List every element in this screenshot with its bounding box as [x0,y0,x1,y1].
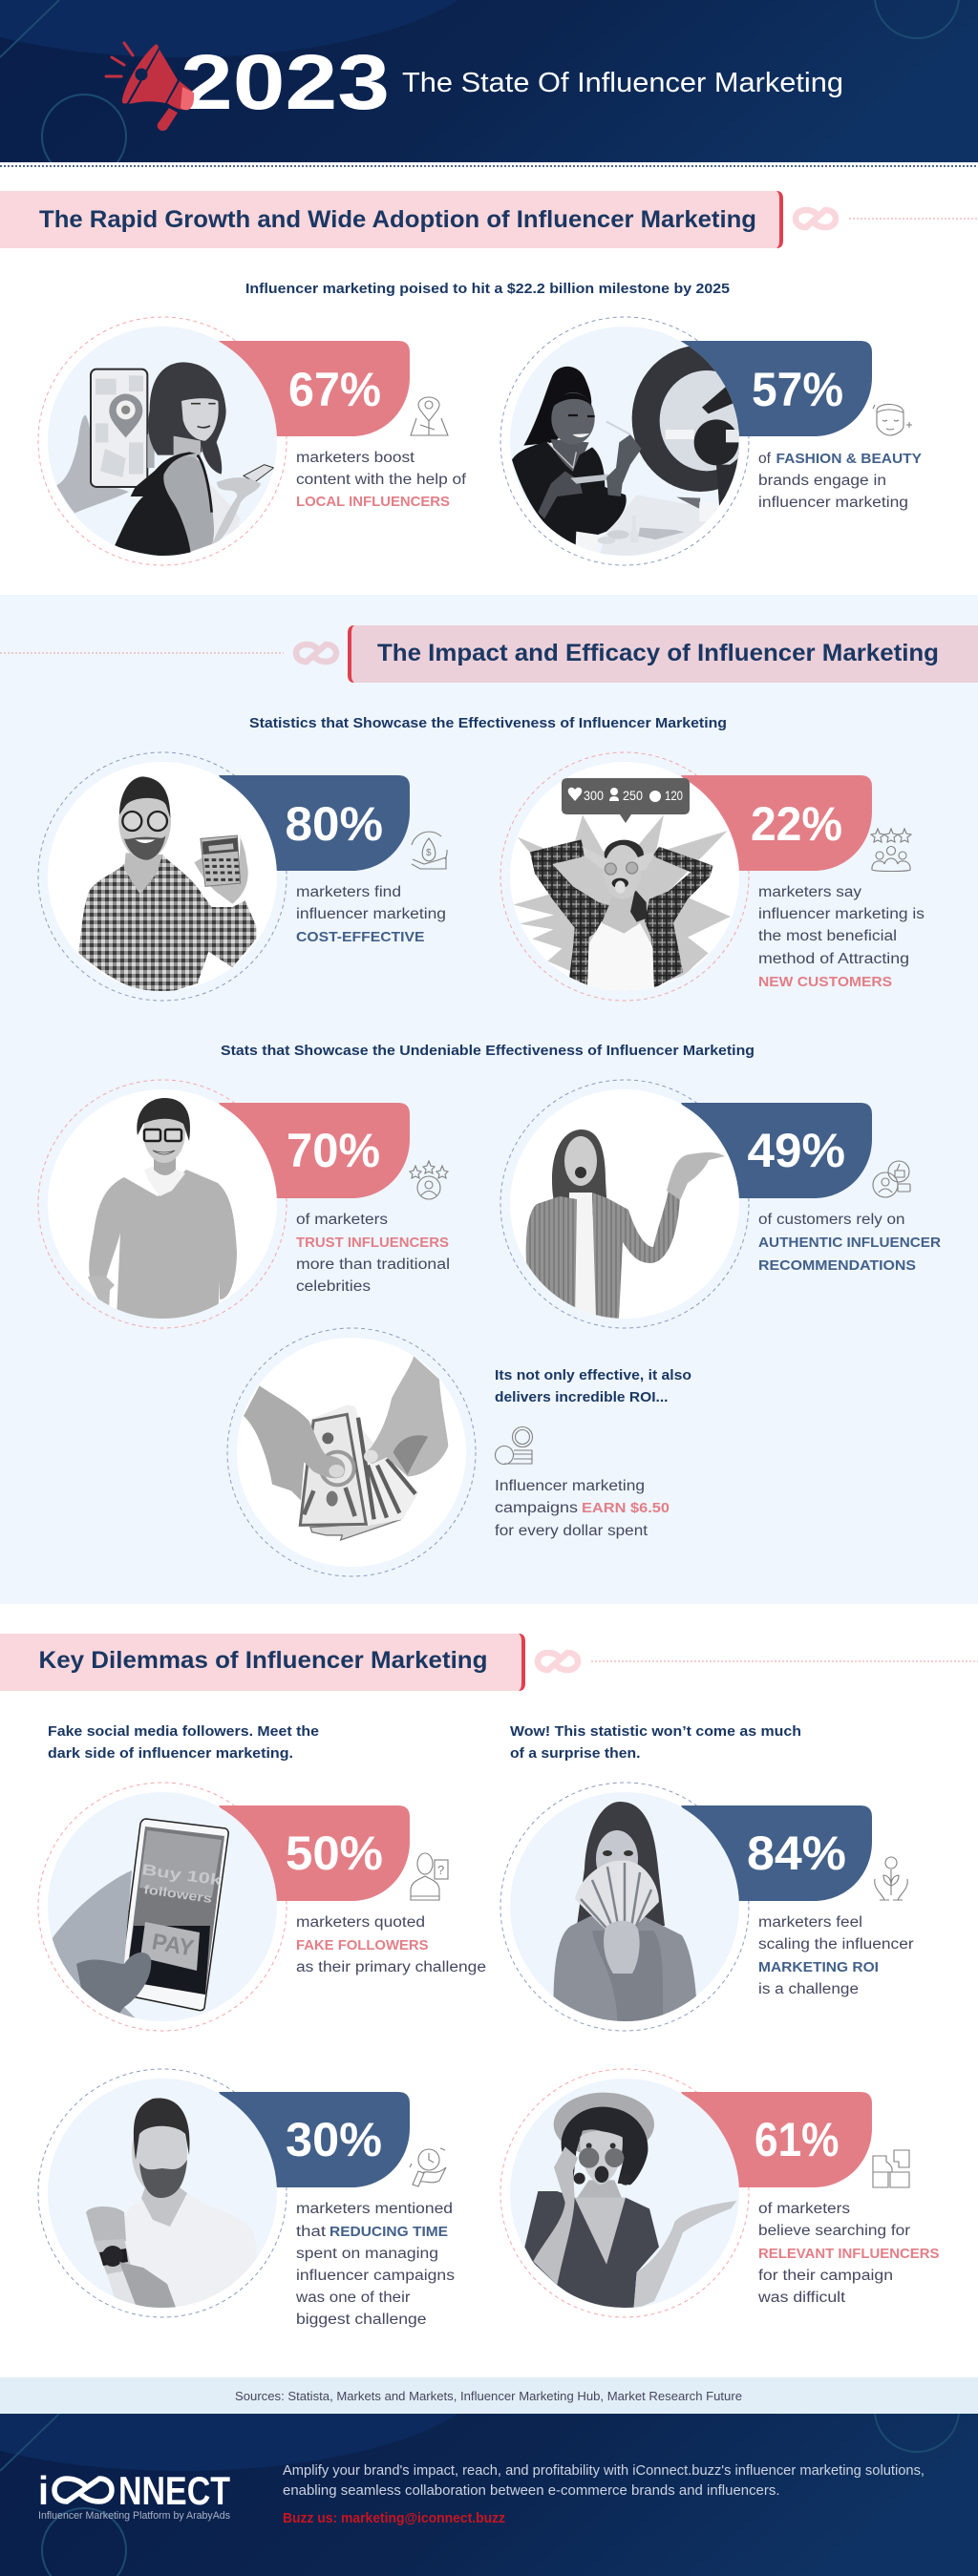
section heading: key dilemmas: Key Dilemmas of Influencer Marketing [38,1647,487,1674]
description: of marketers [758,2201,850,2217]
icon: map pin [411,397,448,435]
description: COST-EFFECTIVE [296,929,424,945]
description [495,1478,670,1539]
percent: 67% [288,363,381,416]
speech bubble: 120 [665,788,683,803]
description: Influencer marketing [495,1478,645,1494]
card: 70% trust influencers [38,1080,450,1328]
photo: hand holding phone [48,1819,228,2026]
card: 80% cost-effective [38,752,447,1001]
photo: surprised woman in straw hat [524,2093,737,2311]
photo: hand holding phone: followers [143,1882,213,1906]
card: 67% local influencers [38,317,467,565]
footer message: Amplify your brand's impact, reach, and profitability with iConnect.buzz's influencer marketing solutions, [283,2462,925,2479]
footer: enabling seamless collaboration between e-commerce brands and influencers. [283,2482,779,2499]
description [296,1914,486,1975]
subheading: Stats that Showcase the Undeniable Effectiveness of Influencer Marketing [221,1043,755,1059]
description [295,2201,455,2328]
sources bar [0,2377,978,2414]
section heading: impact and efficacy: The Impact and Efficacy of Influencer Marketing [377,640,939,666]
description: was difficult [757,2290,846,2306]
card: 22% new customers [500,752,925,1001]
photo: man pointing at watch [86,2098,257,2312]
description: of customers rely on [758,1212,905,1228]
description: AUTHENTIC INFLUENCER [758,1235,941,1251]
description: of [758,451,772,467]
icon: infinity [538,1653,578,1670]
description [296,1212,450,1295]
percent: 30% [286,2113,382,2166]
percent: 22% [751,797,842,851]
description: influencer marketing [758,495,908,511]
description: for every dollar spent [495,1523,648,1539]
description: more than traditional [296,1256,450,1273]
icon: infinity [296,644,336,662]
percent: 57% [752,363,843,416]
intro: statistic surprise: Wow! This statistic won’t come as much [510,1723,801,1740]
header banner [0,0,978,179]
photo: woman with fan of dollars [554,1802,697,2026]
subheading: Influencer marketing poised to hit a $22.2 billion milestone by 2025 [245,281,730,297]
photo: woman with ring light [512,346,739,556]
description [296,884,446,945]
description: scaling the influencer [758,1936,914,1953]
icon: stars and people [871,829,911,871]
description: believe searching for [758,2223,910,2239]
icon: stars and person [410,1161,448,1199]
section heading: impact and efficacy [0,625,978,683]
percent: 84% [747,1826,846,1880]
icon: person with question: ? [437,1863,444,1877]
speech bubble: 300 [584,788,604,803]
description [296,450,467,510]
icon: puzzle [873,2150,909,2187]
subheading: Statistics that Showcase the Effectiveness of Influencer Marketing [249,715,727,731]
section heading: key dilemmas [0,1634,978,1691]
description: celebrities [296,1278,371,1295]
description: TRUST INFLUENCERS [296,1235,449,1251]
logo: i [38,2468,49,2513]
footer [0,2414,978,2576]
icon: face [873,404,912,435]
card: 49% authentic recommendations [500,1080,941,1328]
description: spent on managing [296,2246,438,2262]
percent: 61% [755,2113,839,2166]
intro: fake followers: dark side of influencer marketing. [48,1745,293,1762]
description [758,451,922,511]
icon: hands with plant and coin [875,1857,907,1900]
icon: coins [495,1426,533,1465]
description: marketers boost [296,450,415,466]
icon: money bag cycle: $ [426,848,432,858]
intro: statistic surprise [510,1723,801,1762]
description: MARKETING ROI [758,1959,879,1975]
icon: money bag cycle [412,832,447,869]
description: that [296,2224,327,2240]
percent: 80% [285,797,383,851]
photo: man in sweater offering handshake [88,1098,237,1319]
logo [38,2468,230,2522]
photo: winking woman pointing [526,1130,725,1319]
icon: thumbs up review [873,1161,910,1197]
photo: hand with phone and woman [56,362,274,557]
description: marketers feel [758,1914,862,1931]
description [758,1914,914,1997]
intro: fake followers [48,1723,319,1762]
photo: hand holding phone: Buy 10k [140,1862,223,1890]
icon: person with question [411,1853,448,1900]
description: influencer marketing [296,906,446,922]
description: as their primary challenge [296,1959,486,1975]
description: of marketers [296,1212,388,1228]
description: REDUCING TIME [330,2224,448,2240]
description: FAKE FOLLOWERS [296,1937,428,1953]
section background: impact [0,595,978,1604]
description: influencer marketing is [758,906,925,922]
card: money ROI: delivers incredible ROI... [495,1389,669,1405]
description: is a challenge [758,1981,859,1997]
speech bubble [562,778,690,823]
description: FASHION & BEAUTY [776,451,922,467]
photo: hand holding phone: PAY [150,1929,196,1962]
intro: statistic surprise: of a surprise then. [510,1745,640,1762]
description: influencer campaigns [296,2268,455,2284]
description: the most beneficial [758,928,897,944]
description: NEW CUSTOMERS [758,974,892,990]
card: 30% reducing time [38,2069,455,2328]
card: 61% relevant influencers [500,2069,939,2317]
description [757,2201,939,2306]
description: method of Attracting [758,951,909,967]
photo: hands counting dollars [244,1356,448,1540]
description: marketers mentioned [296,2201,453,2217]
icon: infinity [796,210,836,227]
section heading: rapid growth: The Rapid Growth and Wide Adoption of Influencer Marketing [39,206,756,233]
description [758,1212,941,1274]
sources bar: Sources: Statista, Markets and Markets, Influencer Marketing Hub, Market Research Future [235,2389,742,2403]
description: EARN $6.50 [582,1500,670,1516]
description: LOCAL INFLUENCERS [296,494,450,510]
title year: 2023 [181,39,390,126]
percent: 49% [747,1124,845,1177]
photo: excited woman with burst [513,814,731,995]
intro: fake followers: Fake social media followers. Meet the [48,1723,319,1740]
logo: Influencer Marketing Platform by ArabyAds [38,2510,230,2522]
logo: NNECT [118,2468,230,2513]
title subtitle: The State Of Influencer Marketing [402,68,843,98]
card: 50% fake followers [38,1783,486,2031]
speech bubble: 250 [623,788,643,803]
card: 57% fashion and beauty [500,317,922,565]
percent: 50% [286,1826,383,1880]
callout text: Its not only effective, it also [495,1367,691,1383]
card: money ROI [227,1328,691,1576]
description: marketers say [758,884,861,900]
section heading: rapid growth [0,191,978,248]
description: biggest challenge [296,2312,426,2328]
description: RECOMMENDATIONS [758,1257,916,1274]
description [758,884,925,990]
icon: hand with clock [410,2148,446,2186]
icon: megaphone [106,43,194,131]
description: marketers quoted [296,1914,425,1931]
description: marketers find [296,884,401,900]
card: 84% marketing ROI [500,1783,914,2031]
description: content with the help of [296,472,467,488]
contact: Buzz us: marketing@iconnect.buzz [283,2510,505,2526]
description: was one of their [295,2290,411,2306]
description: for their campaign [758,2268,893,2284]
percent: 70% [287,1124,380,1177]
description: campaigns [495,1500,578,1516]
description: brands engage in [758,473,886,489]
photo: man with calculator [78,776,256,995]
description: RELEVANT INFLUENCERS [758,2246,939,2262]
